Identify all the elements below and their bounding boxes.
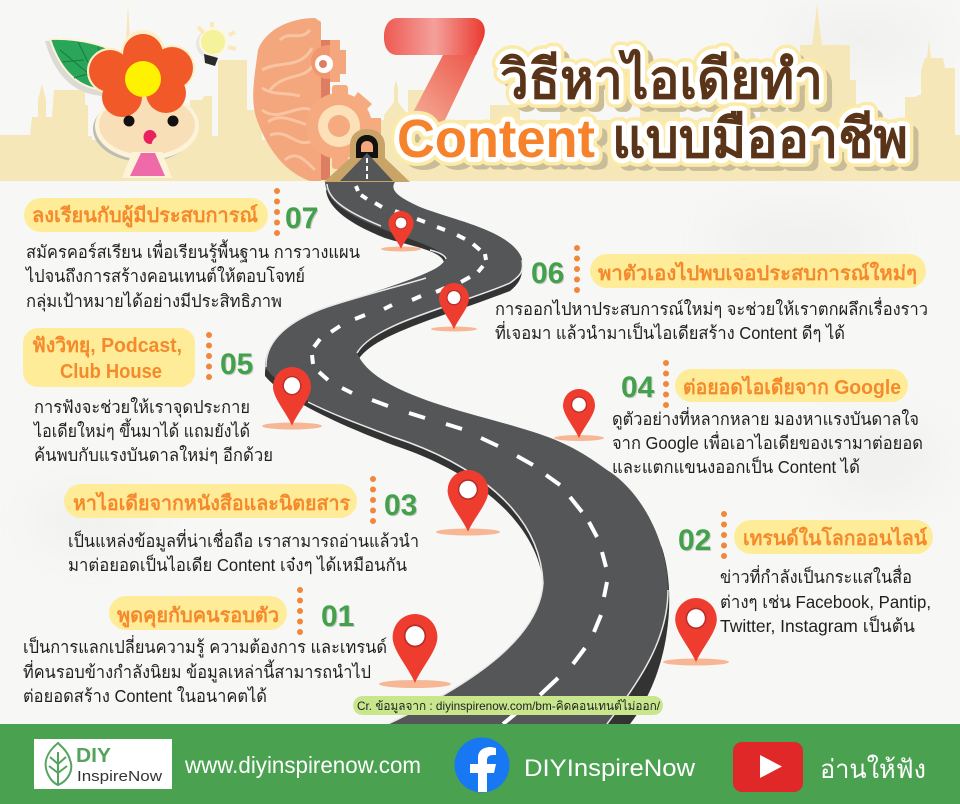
footer bar [0, 724, 960, 804]
location pins [262, 211, 729, 688]
heading pill [23, 328, 195, 387]
body text: จาก Google เพื่อเอาไอเดียของเรามาต่อยอด [612, 431, 923, 453]
title line 2: แบบมืออาชีพ [612, 109, 908, 169]
road centre dashes [312, 186, 607, 724]
body text: ไปจนถึงการสร้างคอนเทนต์ให้ตอบโจทย์ [24, 266, 305, 286]
title line 2: แบบมืออาชีพ [619, 115, 915, 175]
heading pill [24, 198, 268, 232]
header city skyline [0, 3, 960, 181]
body text [720, 565, 931, 636]
title line 1: วิธีหาไอเดียทำ [499, 48, 823, 110]
step 05 [23, 328, 273, 465]
number: 07 [285, 202, 318, 235]
heading pill [675, 369, 908, 402]
body text: และแตกแขนงออกเป็น Content ได้ [612, 456, 860, 477]
title line 2: Content [404, 115, 602, 175]
step 03 [64, 476, 419, 575]
number: 01 [321, 600, 354, 633]
eyes [124, 116, 178, 126]
title line 2: แบบมืออาชีพ [612, 109, 908, 169]
face [93, 92, 199, 162]
body text: สมัครคอร์สเรียน เพื่อเรียนรู้พื้นฐาน การวางแผน [26, 239, 360, 263]
dots [663, 360, 669, 408]
facebook name: DIYInspireNow [524, 755, 696, 782]
title line 1: วิธีหาไอเดียทำ [499, 48, 823, 110]
body text: ไอเดียใหม่ๆ ขึ้นมาได้ แถมยังได้ [32, 418, 250, 441]
pin 7 [381, 211, 421, 252]
body text: ที่คนรอบข้างกำลังนิยม ข้อมูลเหล่านี้สามารถนำไป [23, 659, 371, 683]
pin 1 [379, 614, 451, 688]
step 04 [612, 360, 923, 477]
heading pill [734, 520, 933, 554]
logo: InspireNow [77, 768, 162, 785]
title line 2: Content [397, 109, 595, 169]
body [122, 152, 172, 178]
logo [34, 739, 172, 789]
body text: ค้นพบกับแรงบันดาลใหม่ๆ อีกด้วย [34, 445, 273, 465]
dots [574, 245, 580, 293]
heading pill [109, 596, 287, 630]
credit note: Cr. ข้อมูลจาก : diyinspirenow.com/bm-คิดคอนเทนต์ไม่ออก/ [357, 699, 661, 714]
body text [32, 397, 273, 465]
heading pill: พาตัวเองไปพบเจอประสบการณ์ใหม่ๆ [598, 261, 917, 285]
icon: gears [306, 40, 381, 180]
title line 1: วิธีหาไอเดียทำ [506, 54, 830, 116]
body text: ต่อยอดสร้าง Content ในอนาคตได้ [23, 686, 267, 706]
body text [23, 635, 387, 706]
title line 1: วิธีหาไอเดียทำ [499, 48, 823, 110]
dots [206, 332, 212, 380]
icon: light bulb [196, 22, 236, 66]
flower petals [89, 32, 193, 117]
body text: ต่างๆ เช่น Facebook, Pantip, [720, 592, 931, 612]
number: 03 [384, 489, 417, 522]
youtube label: อ่านให้ฟัง [820, 754, 926, 784]
road edge lines [266, 184, 668, 724]
body text [68, 529, 419, 575]
title line 2 [397, 109, 915, 175]
icon: brain [253, 18, 321, 181]
pin 5 [262, 367, 322, 430]
heading pill: หาไอเดียจากหนังสือและนิตยสาร [73, 491, 350, 515]
heading pill: Club House [60, 361, 162, 383]
big red number 7 [384, 18, 485, 122]
title line 2: แบบมืออาชีพ [612, 109, 908, 169]
heading pill: ลงเรียนกับผู้มีประสบการณ์ [32, 204, 258, 229]
body text: การออกไปหาประสบการณ์ใหม่ๆ จะช่วยให้เราตกผลึกเรื่องราว [495, 297, 928, 319]
heading pill: เทรนด์ในโลกออนไลน์ [743, 526, 927, 550]
icon: facebook [454, 738, 510, 792]
number: 02 [678, 524, 711, 557]
step 01 [23, 587, 387, 706]
title line 2: Content [397, 109, 595, 169]
body text: ข่าวที่กำลังเป็นกระแสในสื่อ [720, 565, 912, 587]
road surface [265, 182, 668, 724]
heading pill: ฟังวิทยุ, Podcast, [32, 335, 182, 358]
dots [370, 476, 376, 524]
step 02 [678, 511, 933, 636]
body text: เป็นการแลกเปลี่ยนความรู้ ความต้องการ และเทรนด์ [23, 635, 387, 658]
body text: มาต่อยอดเป็นไอเดีย Content เจ๋งๆ ได้เหมือนกัน [68, 554, 407, 575]
body text [495, 297, 928, 343]
dots [274, 188, 280, 236]
body text: เป็นแหล่งข้อมูลที่น่าเชื่อถือ เราสามารถอ่านแล้วนำ [68, 529, 419, 552]
number: 06 [531, 257, 564, 290]
heading pill: ต่อยอดไอเดียจาก Google [683, 375, 901, 399]
pin 2 [663, 598, 729, 666]
icon: green leaf [45, 39, 130, 96]
pin 4 [554, 389, 604, 441]
pin 6 [431, 283, 477, 332]
website: www.diyinspirenow.com [184, 752, 421, 778]
title [397, 48, 915, 175]
step 07 [24, 188, 360, 312]
character: flower mascot [45, 32, 199, 178]
body text: ที่เจอมา แล้วนำมาเป็นไอเดียสร้าง Content ดีๆ ได้ [495, 321, 845, 343]
body text: Twitter, Instagram เป็นต้น [720, 615, 915, 636]
icon: youtube [733, 742, 803, 792]
number: 05 [220, 348, 253, 381]
winding road [265, 182, 669, 724]
brain and gears [253, 18, 381, 181]
logo: DIY [76, 745, 112, 767]
heading pill: พูดคุยกับคนรอบตัว [117, 605, 279, 629]
body text [612, 407, 923, 477]
body text: กลุ่มเป้าหมายได้อย่างมีประสิทธิภาพ [26, 291, 282, 312]
number: 04 [621, 371, 655, 404]
body text [24, 239, 360, 312]
heading pill [64, 484, 357, 518]
dots [297, 587, 303, 635]
step 06 [495, 245, 928, 343]
heading pill [590, 254, 926, 288]
road shoulder [265, 190, 669, 724]
dots [721, 511, 727, 559]
body text: การฟังจะช่วยให้เราจุดประกาย [34, 397, 250, 418]
tunnel [324, 129, 410, 182]
title line 2: Content [397, 109, 595, 169]
pin 3 [436, 470, 500, 536]
body text: ดูตัวอย่างที่หลากหลาย มองหาแรงบันดาลใจ [612, 407, 919, 430]
